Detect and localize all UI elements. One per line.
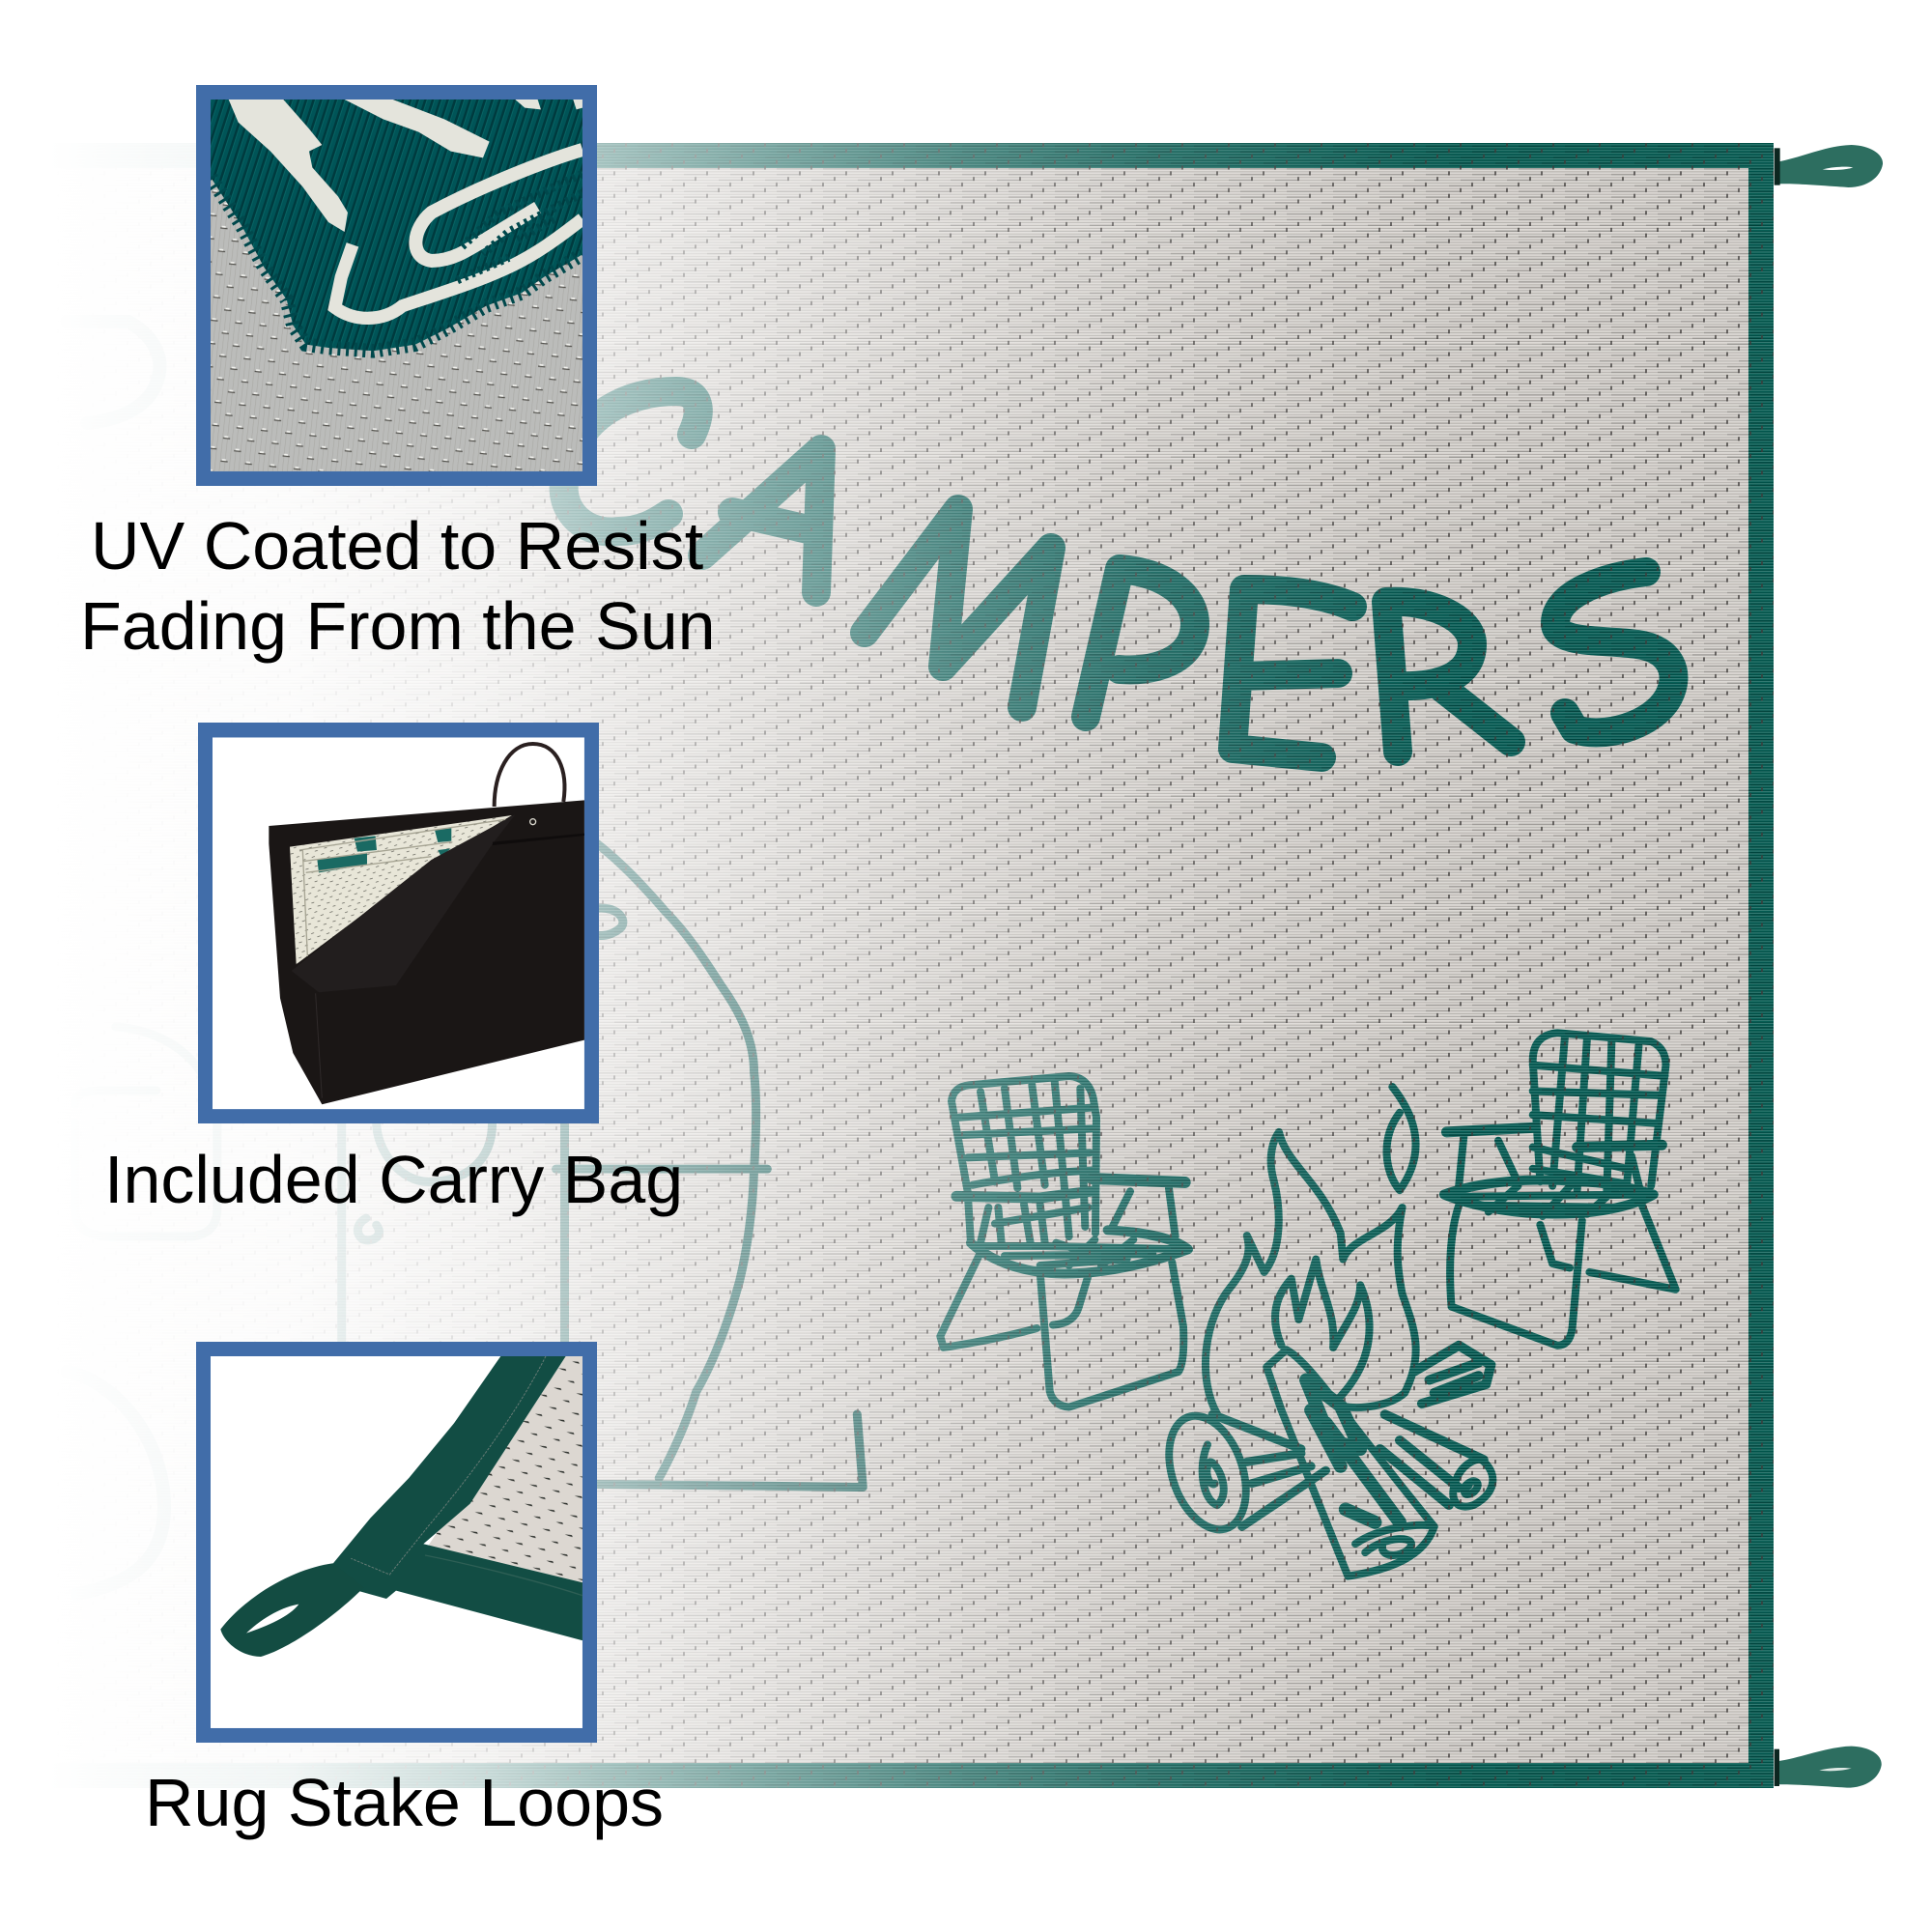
caption: UV coated xyxy=(80,508,716,664)
caption: UV coated: UV Coated to Resist xyxy=(91,508,703,583)
rug drawing: left lawn chair xyxy=(940,1076,1188,1407)
rug stake loop: top right xyxy=(1775,145,1883,187)
inset photo: teal pattern weave xyxy=(211,99,582,471)
rug lettering: CAMPERS xyxy=(564,391,1673,757)
rug stake loop: bottom right xyxy=(1775,1747,1882,1788)
rug drawing: right lawn chair xyxy=(1444,1033,1676,1346)
rug drawing: faded far-left shapes xyxy=(68,322,164,1594)
inset panel: UV coated weave close-up xyxy=(196,85,597,486)
inset frame xyxy=(198,723,599,1123)
rug fade to white xyxy=(43,135,1781,1797)
inset panel: rug stake loop photo xyxy=(196,1342,597,1743)
caption: stake loops: Rug Stake Loops xyxy=(145,1765,664,1840)
rug drawing: campfire xyxy=(1156,1087,1492,1577)
rug base and binding xyxy=(48,143,1774,1788)
rug woven texture xyxy=(48,143,1774,1788)
caption: UV coated: Fading From the Sun xyxy=(80,588,716,664)
caption: carry bag: Included Carry Bag xyxy=(104,1142,683,1217)
inset frame xyxy=(196,1342,597,1743)
inset photo: rug corner with loop xyxy=(211,1356,582,1728)
panel: campers rug xyxy=(43,135,1781,1797)
inset frame xyxy=(196,85,597,486)
rug drawing: tent outline xyxy=(75,831,863,1488)
inset panel: carry bag photo xyxy=(198,723,599,1123)
inset photo: black bag with folded rug xyxy=(213,737,584,1109)
